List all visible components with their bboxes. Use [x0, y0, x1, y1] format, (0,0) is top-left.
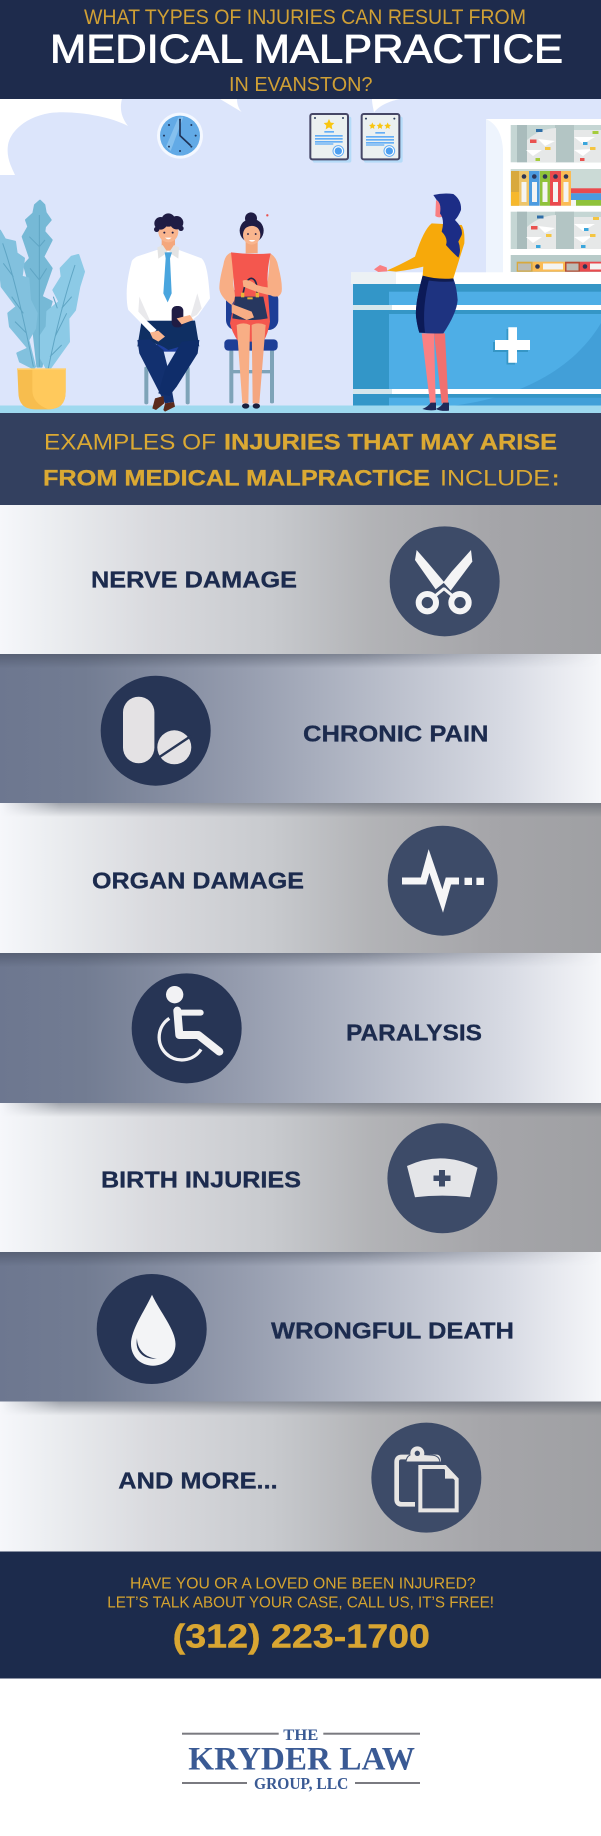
label: chronic pain: CHRONIC PAIN: [303, 721, 488, 747]
icon: medical cross on counter: [493, 327, 530, 364]
icon: scissors: [390, 526, 500, 636]
stool: [144, 341, 190, 404]
reception counter: [351, 272, 601, 407]
binders: [511, 171, 601, 206]
stacked papers third shelf: [517, 212, 601, 249]
icon: blood drop: [97, 1274, 207, 1384]
panel: organ damage row: [0, 803, 601, 953]
call to action text: LET’S TALK ABOUT YOUR CASE, CALL US, IT’S FREE!: [107, 1594, 494, 1611]
heading line 1: EXAMPLES OF: [44, 429, 216, 454]
logo: the kryder law group: KRYDER LAW: [188, 1742, 415, 1778]
plant pot: [17, 369, 66, 409]
bottom shelf files: [517, 262, 601, 272]
panel: paralysis row: [0, 953, 601, 1103]
panel: title header: [0, 0, 601, 100]
plant: [0, 201, 84, 409]
heading line 2: FROM MEDICAL MALPRACTICE: [43, 465, 430, 490]
title line 3: IN EVANSTON?: [229, 73, 372, 96]
icon: wheelchair: [132, 973, 242, 1083]
title line 2: MEDICAL MALPRACTICE: [50, 28, 563, 72]
chair: [224, 290, 278, 403]
panel: call to action footer: [0, 1552, 601, 1678]
woman seated: [219, 212, 282, 409]
icon: clipboard and page: [371, 1423, 481, 1533]
white cloud wall shapes: [0, 99, 400, 175]
icon: pills: [101, 676, 211, 786]
icon: heartbeat pulse: [388, 826, 498, 936]
logo: the kryder law group: THE: [283, 1727, 318, 1744]
panel: chronic pain row: [0, 654, 601, 803]
stacked papers top shelf: [517, 125, 601, 162]
panel: birth injuries row: [0, 1103, 601, 1252]
logo: the kryder law group: GROUP, LLC: [254, 1774, 348, 1793]
heading line 2: :: [552, 465, 559, 490]
panel: waiting room illustration: [0, 99, 601, 414]
label: nerve damage: NERVE DAMAGE: [91, 567, 297, 593]
heading line 2: INCLUDE: [440, 465, 550, 490]
panel: wrongful death row: [0, 1252, 601, 1402]
logo: the kryder law group: [182, 1727, 420, 1793]
heading line 1: INJURIES THAT MAY ARISE: [224, 429, 557, 454]
shelving cabinet: [486, 119, 601, 272]
title line 1: WHAT TYPES OF INJURIES CAN RESULT FROM: [84, 6, 526, 29]
panel: and more row: [0, 1402, 601, 1552]
icon: certificate three stars: [362, 114, 403, 163]
heading line 2: [43, 465, 559, 490]
man seated: [127, 213, 210, 412]
icon: certificate one star: [310, 114, 351, 163]
phone number: (312) 223-1700: [173, 1617, 430, 1654]
call to action text: [107, 1575, 494, 1611]
call to action text: HAVE YOU OR A LOVED ONE BEEN INJURED?: [130, 1575, 476, 1592]
receptionist: [374, 194, 464, 411]
label: and more: AND MORE...: [118, 1468, 278, 1494]
icon: wall clock: [157, 113, 203, 159]
label: organ damage: ORGAN DAMAGE: [92, 867, 304, 893]
panel: examples heading: [0, 413, 601, 505]
label: wrongful death: WRONGFUL DEATH: [271, 1317, 514, 1343]
icon: nurse cap: [387, 1123, 497, 1233]
label: birth injuries: BIRTH INJURIES: [101, 1166, 301, 1192]
panel: nerve damage row: [0, 505, 601, 654]
label: paralysis: PARALYSIS: [346, 1020, 482, 1046]
floor: [0, 406, 601, 414]
heading line 1: [44, 429, 557, 454]
